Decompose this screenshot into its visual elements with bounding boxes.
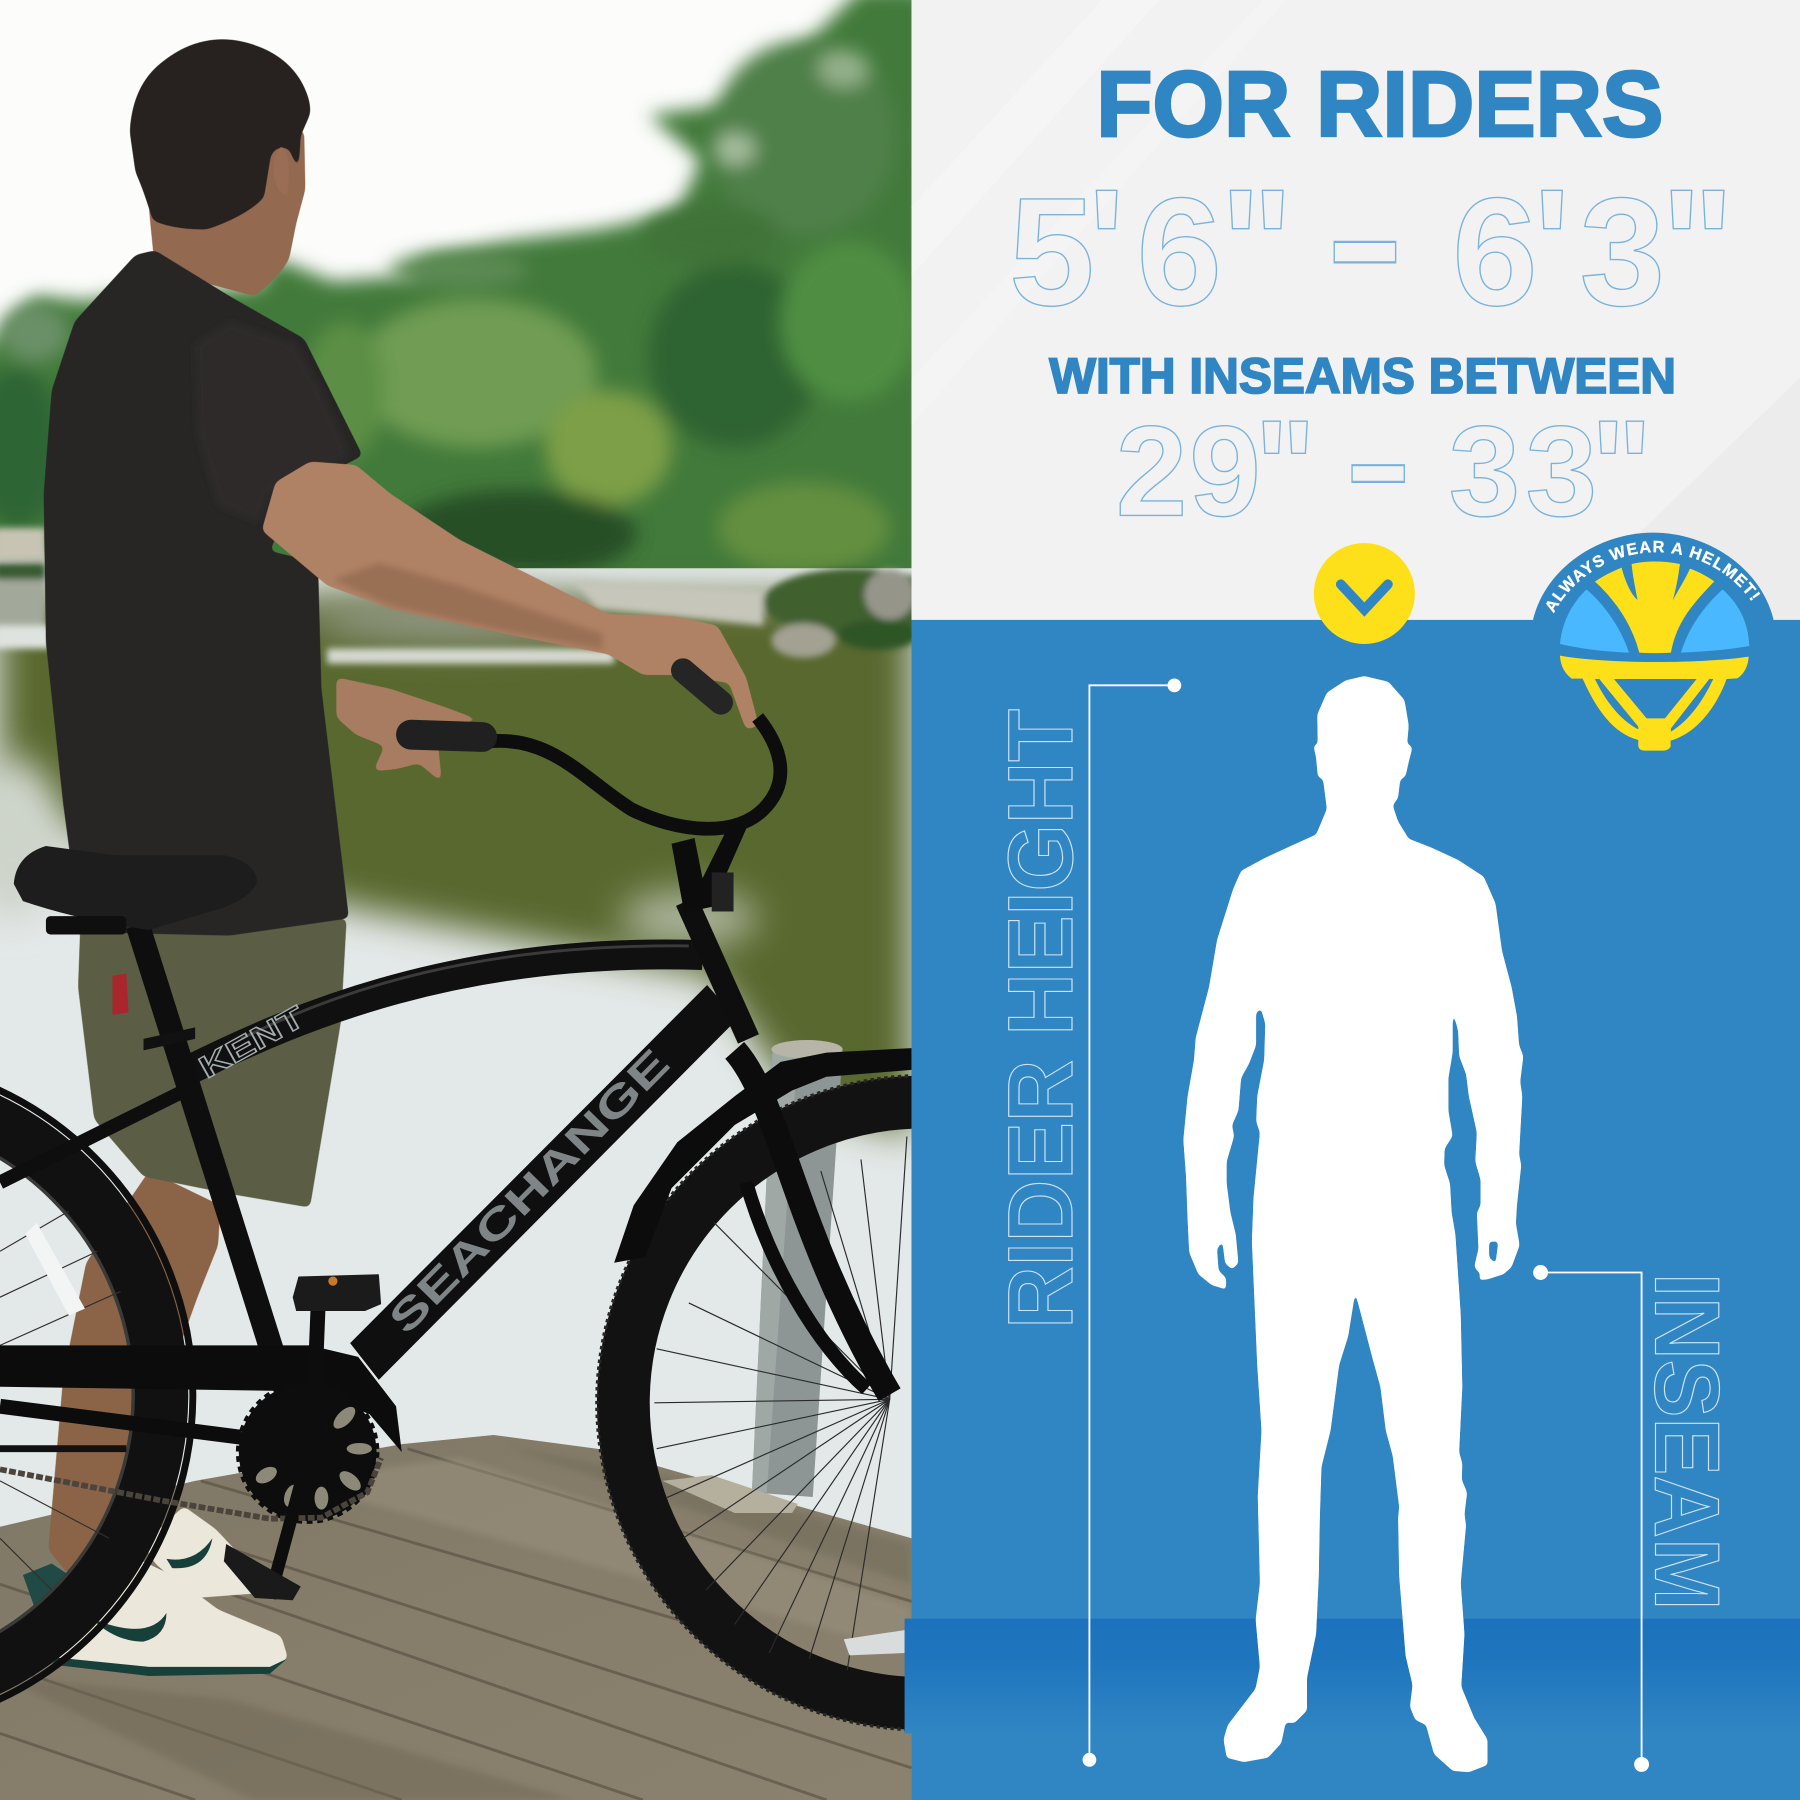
dock post [662,1040,843,1513]
bicycle front wheel [595,1074,912,1732]
panel: lakeside photo of rider with bicycle [0,0,912,1800]
inseam range: 33" [1449,395,1652,543]
inseam range: 29" [1116,395,1316,543]
rider height range: 6'3" [1452,157,1734,338]
rider legs and shoes [23,1171,288,1676]
chainring, chain, crank and pedals [0,1274,381,1600]
bicycle rear wheel [0,1058,193,1731]
lake water [0,528,947,1607]
title: FOR RIDERS [1096,52,1663,156]
rider arms and hands [262,461,759,783]
wooden dock [0,1435,911,1800]
inseam range: – [1349,365,1408,555]
frame label: SEACHANGE: SEACHANGE [380,1040,678,1343]
bicycle seat [14,846,257,934]
rider head and neck [130,39,310,296]
label: rider height: RIDER HEIGHT [990,709,1092,1329]
rider height range [1009,122,1734,353]
label: inseam: INSEAM [1635,1273,1737,1610]
icon: always wear a helmet badge [1533,532,1774,751]
rider height bracket [1083,678,1181,1767]
rider height range: – [1330,122,1399,353]
rider height range: 5'6" [1009,157,1293,338]
inseam range [1116,365,1652,555]
panel: rider size diagram [905,620,1800,1800]
trees on far shore [0,0,912,568]
floor band [905,1619,1800,1733]
rider t-shirt [44,250,363,936]
icon: rider silhouette [1183,676,1523,1772]
subheading: WITH INSEAMS BETWEEN [1049,347,1676,404]
inseam bracket [1533,1265,1649,1772]
frame label: KENT: KENT [193,999,310,1085]
panel: top information area [911,0,1800,620]
rider shorts [78,918,347,1208]
bicycle frame [0,901,911,1452]
icon: yellow chevron button [1314,543,1415,644]
badge curved text: ALWAYS WEAR A HELMET! [1546,540,1760,614]
handlebar and grips [411,670,780,913]
